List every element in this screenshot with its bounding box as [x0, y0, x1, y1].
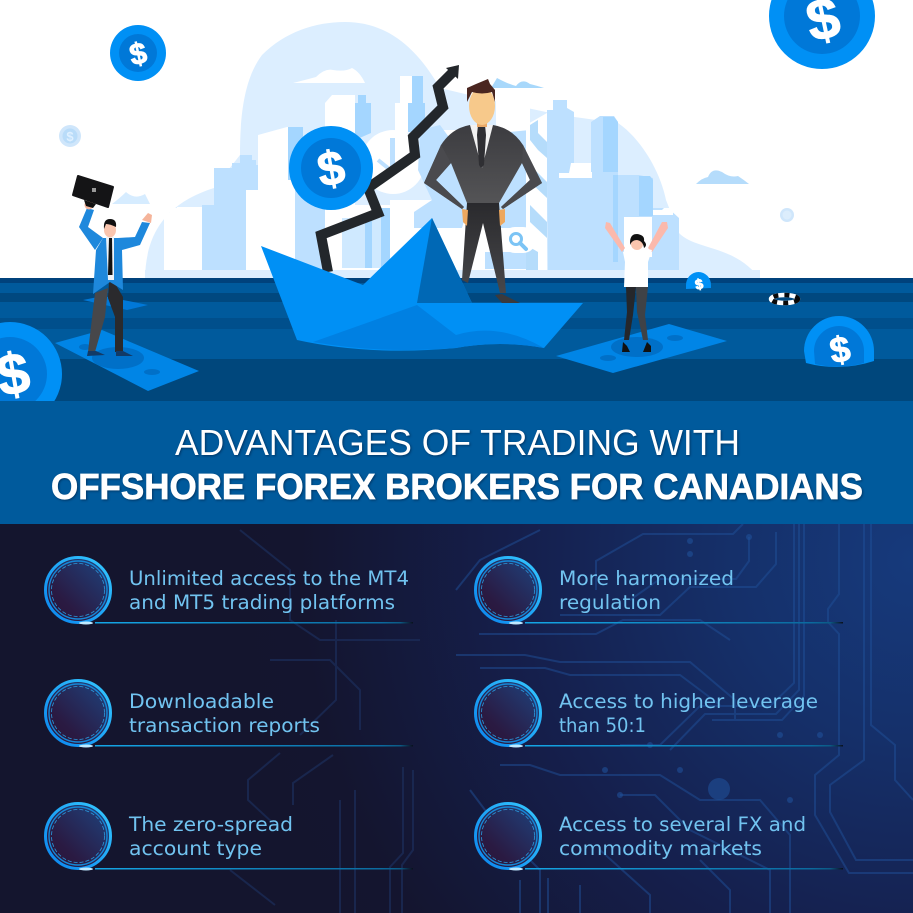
list item: MT4 and MT5 platforms: [46, 558, 413, 624]
list item: higher leverage: Access to higher leverage: [559, 690, 818, 713]
icon: pale coin left: [59, 125, 81, 147]
icon: dollar coin top right: [769, 0, 875, 69]
list item: higher leverage: [476, 680, 843, 748]
panel: dark circuit background: [0, 524, 913, 913]
list item: MT4 and MT5 platforms: and MT5 trading platforms: [129, 591, 395, 614]
figure: woman with raised arms: [605, 222, 668, 352]
list item: downloadable reports: transaction reports: [129, 714, 320, 737]
icon: pale coin left: $: [66, 129, 74, 144]
background: sky: [0, 0, 913, 402]
list item: harmonized regulation: [476, 558, 843, 624]
title line 1: ADVANTAGES OF TRADING WITH: [175, 422, 740, 463]
circuit pattern left: [230, 530, 420, 913]
figure: man in blue jacket with briefcase: [73, 176, 152, 356]
icon: dollar coin bottom left: [0, 322, 62, 426]
list item: FX and commodity markets: Access to several FX and: [559, 813, 806, 836]
icon: life ring: [771, 295, 798, 303]
list item: zero-spread account: account type: [129, 837, 262, 860]
sea stripes: [0, 278, 913, 402]
list item: MT4 and MT5 platforms: Unlimited access to the MT4: [129, 567, 409, 590]
list item: downloadable reports: [46, 680, 413, 748]
illustration: city skyline: [112, 22, 760, 279]
list item: zero-spread account: [46, 804, 413, 870]
icon: dollar bill under man: [55, 330, 199, 391]
list item: FX and commodity markets: [476, 804, 843, 870]
circuit pattern right: [456, 524, 913, 913]
title band: [0, 401, 913, 524]
icon: large dollar coin: $: [314, 141, 349, 198]
list item: downloadable reports: Downloadable: [129, 690, 274, 713]
icon: pale coin right: [780, 208, 794, 222]
arrow: rising black chart line: [321, 65, 459, 272]
icon: half-sunk dollar coin right: $: [826, 328, 853, 371]
white paper behind woman: [624, 217, 652, 257]
icon: dollar coin top left: [110, 25, 166, 81]
icon: dollar bill small behind man: [83, 296, 148, 310]
list item: harmonized regulation: More harmonized: [559, 567, 734, 590]
icon: half-sunk dollar coin right: [804, 316, 874, 371]
icon: partly sunk small coin: [686, 272, 711, 293]
icon: dollar bill under woman: [556, 324, 727, 373]
figure: businessman in dark suit: [424, 79, 542, 303]
icon: dollar coin top left: $: [127, 37, 150, 72]
title line 2: OFFSHORE FOREX BROKERS FOR CANADIANS: [51, 466, 863, 507]
boat: paper boat: [261, 218, 583, 351]
list item: harmonized regulation: regulation: [559, 591, 661, 614]
list item: zero-spread account: The zero-spread: [128, 813, 293, 836]
icon: large dollar coin: [289, 126, 373, 210]
icon: magnifier bubble: [502, 227, 536, 253]
icon: partly sunk small coin: $: [694, 275, 705, 293]
list item: FX and commodity markets: commodity markets: [559, 837, 762, 860]
list item: higher leverage: than 50:1: [559, 714, 646, 737]
